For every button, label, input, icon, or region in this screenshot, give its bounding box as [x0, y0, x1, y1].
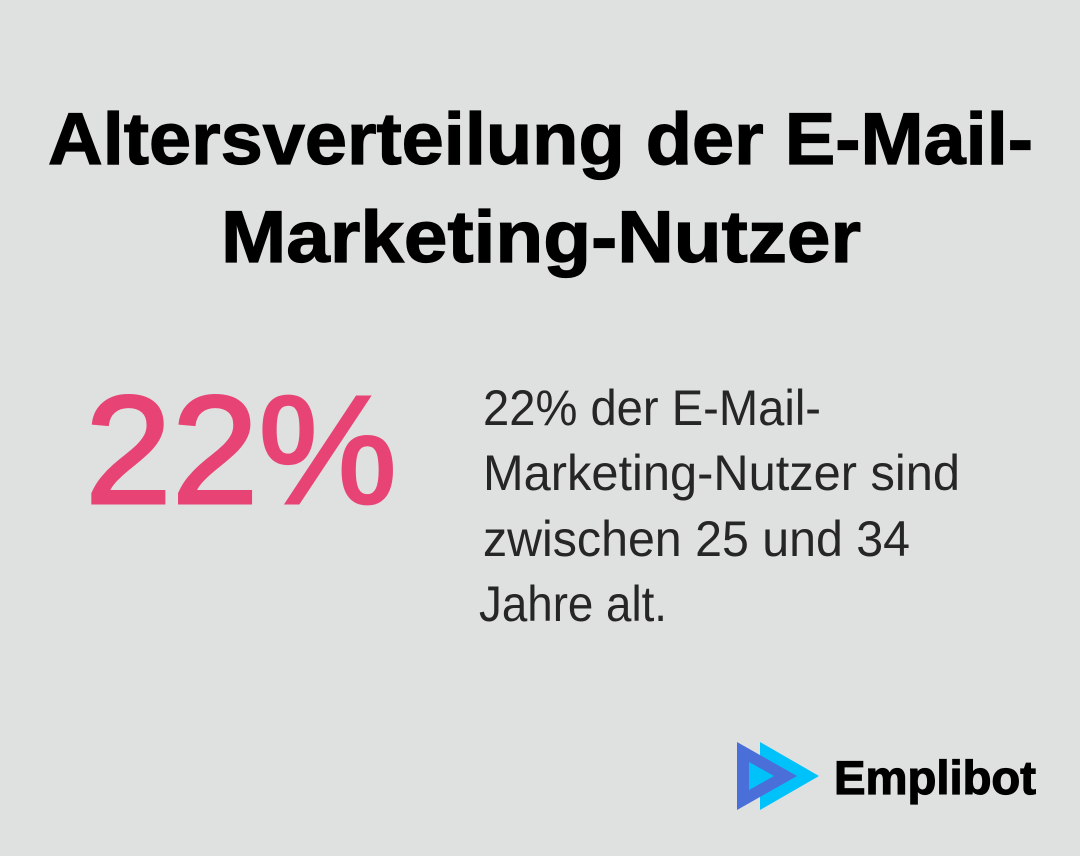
big statistic: 22%: 22% — [85, 364, 397, 536]
logo: Emplibot — [737, 742, 1036, 810]
description text: Marketing-Nutzer sind — [483, 445, 960, 501]
description text: zwischen 25 und 34 — [483, 511, 910, 567]
title: Altersverteilung der E-Mail- — [48, 99, 1033, 180]
description text — [479, 380, 960, 632]
title — [48, 99, 1033, 278]
logo wordmark: Emplibot — [834, 751, 1036, 804]
description text: 22% der E-Mail- — [483, 380, 821, 436]
description text: Jahre alt. — [479, 576, 667, 632]
title: Marketing-Nutzer — [221, 197, 861, 278]
icon: play triangles — [737, 742, 819, 810]
